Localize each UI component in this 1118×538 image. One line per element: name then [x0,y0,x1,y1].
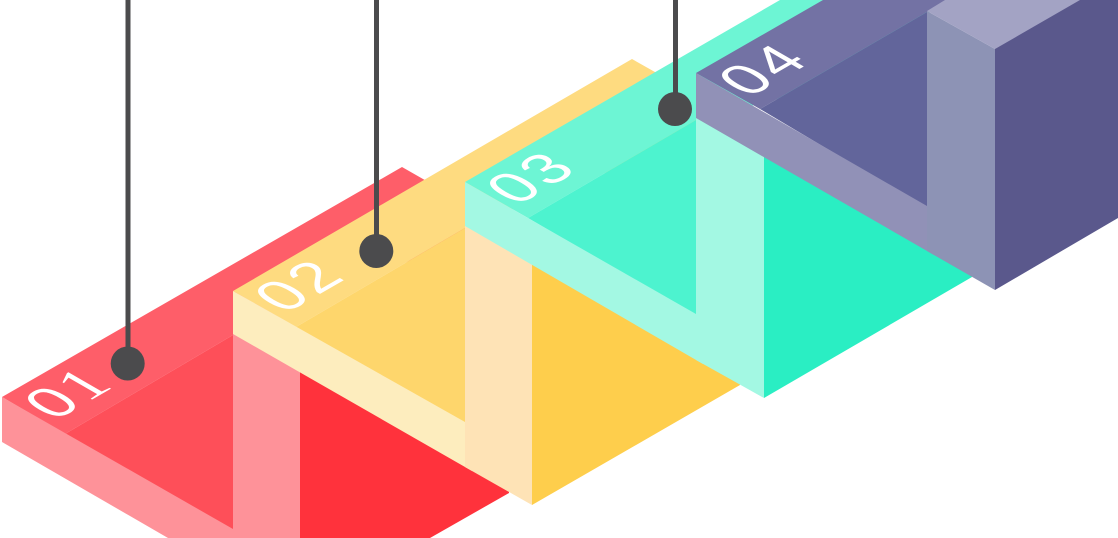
yellow inner triangle [296,228,465,424]
label 02: 02 [238,250,361,321]
step 01: red block [2,167,509,538]
yellow right face [532,255,740,505]
pointer for step 01 [111,0,145,380]
label 04: 04 [702,34,825,105]
green column [696,107,764,398]
label 03: 03 [470,142,593,213]
step 03: green block [465,0,972,398]
purple top cap [927,0,1080,49]
green front lip [465,182,703,364]
step 04: purple block [696,0,1118,290]
yellow front lip [233,291,472,471]
red front lip [2,397,240,538]
pointer for step 02 [359,0,393,268]
green inner triangle [528,120,696,316]
red inner triangle [65,335,233,531]
red right face [300,360,509,538]
green right face [764,145,972,398]
green top surface band [465,0,930,218]
label 01: 01 [8,358,130,428]
purple inner triangle [760,12,927,208]
purple right face [995,0,1118,290]
step 02: yellow block [233,59,740,505]
red top surface band [2,167,500,434]
yellow column [465,215,532,505]
yellow top surface band [233,59,740,327]
purple top surface band [696,0,980,109]
purple column [927,11,995,290]
purple front lip [696,73,934,255]
pointer for step 03 [658,0,692,126]
red column [233,320,300,538]
